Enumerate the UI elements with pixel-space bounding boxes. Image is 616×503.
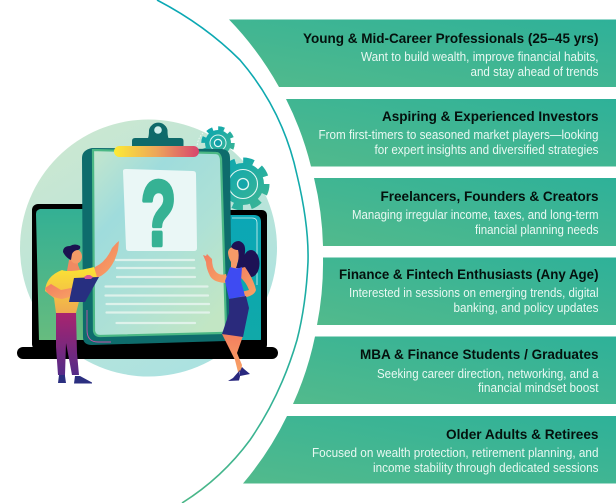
panel: finance and fintech enthusiasts xyxy=(317,258,616,325)
description xyxy=(361,50,598,79)
band background xyxy=(243,416,616,484)
laptop base xyxy=(17,340,278,359)
laptop screen right xyxy=(200,210,267,350)
woman hair xyxy=(231,241,245,268)
clipboard board xyxy=(82,148,232,345)
man forearm xyxy=(45,284,78,299)
icon: large gear xyxy=(220,160,266,208)
heading: Aspiring & Experienced Investors xyxy=(382,108,599,124)
person: man with clipboard xyxy=(45,241,119,384)
description: for expert insights and diversified strategies xyxy=(374,143,598,157)
man face xyxy=(70,250,82,264)
heading: Young & Mid-Career Professionals (25–45 yrs) xyxy=(303,30,598,46)
man torso xyxy=(45,267,97,313)
woman hair bun xyxy=(242,250,260,277)
description: Interested in sessions on emerging trends, digital xyxy=(349,286,598,300)
person: woman xyxy=(203,241,260,381)
description xyxy=(312,446,599,475)
question mark: ? xyxy=(141,163,176,265)
clipboard colour bar xyxy=(114,146,199,157)
band background xyxy=(314,178,616,246)
band background xyxy=(286,99,616,166)
woman legs xyxy=(222,334,243,372)
man clipboard clip xyxy=(84,275,93,279)
clipboard clip xyxy=(132,123,184,146)
description: banking, and policy updates xyxy=(454,301,598,315)
panel: audience arc line xyxy=(157,0,308,503)
panel: young and mid-career professionals xyxy=(229,20,616,87)
description: Managing irregular income, taxes, and long-term xyxy=(352,208,598,222)
description: financial planning needs xyxy=(475,223,598,237)
description xyxy=(352,208,598,237)
man hair xyxy=(63,244,80,260)
card with question mark xyxy=(123,163,197,265)
man neck xyxy=(67,260,80,272)
panel: MBA and finance students xyxy=(293,336,616,404)
heading: Finance & Fintech Enthusiasts (Any Age) xyxy=(339,266,598,282)
description: From first-timers to seasoned market players—looking xyxy=(318,128,599,142)
heading: MBA & Finance Students / Graduates xyxy=(360,346,599,362)
heading: Older Adults & Retirees xyxy=(446,426,599,442)
heading: Freelancers, Founders & Creators xyxy=(380,188,599,204)
band background xyxy=(293,336,616,404)
description: and stay ahead of trends xyxy=(470,65,598,79)
man shoes xyxy=(58,375,92,384)
band background xyxy=(229,20,616,87)
description: Focused on wealth protection, retirement planning, and xyxy=(312,446,599,460)
man clipboard xyxy=(69,277,99,302)
clipboard text lines xyxy=(106,260,209,323)
panel: aspiring and experienced investors xyxy=(286,99,616,166)
woman head xyxy=(228,246,240,270)
description: financial mindset boost xyxy=(478,381,599,395)
woman skirt xyxy=(222,296,249,337)
woman blouse xyxy=(225,267,245,299)
panel: older adults and retirees xyxy=(243,416,616,484)
icon: small gear xyxy=(197,128,232,158)
description: income stability through dedicated sessions xyxy=(373,461,598,475)
panel: freelancers, founders and creators xyxy=(314,178,616,246)
man legs xyxy=(56,313,79,375)
man raised arm xyxy=(92,241,119,280)
description xyxy=(377,367,599,395)
woman shoes xyxy=(228,367,250,381)
pink accent line xyxy=(87,310,111,342)
description xyxy=(318,128,599,157)
clipboard paper xyxy=(93,150,226,336)
woman far arm on hip xyxy=(237,267,256,298)
description: Seeking career direction, networking, and a xyxy=(377,367,599,381)
laptop screen left xyxy=(32,204,102,350)
description xyxy=(349,286,598,315)
woman raised arm xyxy=(203,254,228,283)
band background xyxy=(317,258,616,325)
illustration: clipboard, laptop and two people xyxy=(17,120,278,384)
background circle xyxy=(20,120,277,376)
description: Want to build wealth, improve financial habits, xyxy=(361,50,598,64)
